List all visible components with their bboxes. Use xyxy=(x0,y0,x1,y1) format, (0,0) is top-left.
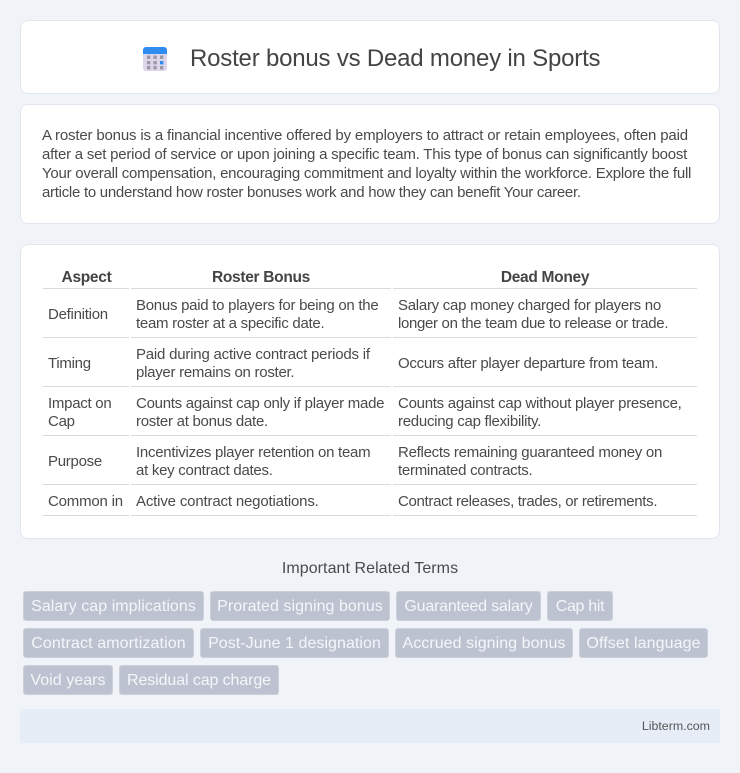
intro text panel xyxy=(20,104,720,224)
row: Purpose: Purpose xyxy=(48,453,102,470)
comparison table panel: Bonus paid to players for being on the xyxy=(136,297,378,314)
comparison table panel: terminated contracts. xyxy=(398,462,532,479)
icon: calendar xyxy=(143,47,167,71)
column heading: Roster Bonus: Roster Bonus xyxy=(212,269,310,286)
related term tags: Residual cap charge xyxy=(127,672,271,689)
comparison table panel: player remains on roster. xyxy=(136,364,294,381)
row: Definition: Definition xyxy=(48,306,108,323)
intro text panel: after a set period of service or upon joining a specific team. This type of bonus can significantly boost xyxy=(42,146,687,163)
comparison table panel xyxy=(20,244,720,539)
related term tags: Accrued signing bonus xyxy=(403,635,565,652)
related term tags: Salary cap implications xyxy=(31,598,196,615)
related term tags: Post-June 1 designation xyxy=(208,635,381,652)
comparison table panel: Occurs after player departure from team. xyxy=(398,355,658,372)
related term tags: Cap hit xyxy=(556,598,604,615)
comparison table panel: roster at bonus date. xyxy=(136,413,268,430)
comparison table panel: Incentivizes player retention on team xyxy=(136,444,370,461)
comparison table panel: reducing cap flexibility. xyxy=(398,413,541,430)
column heading: Dead Money: Dead Money xyxy=(501,269,589,286)
comparison table panel: team roster at a specific date. xyxy=(136,315,324,332)
related term tags: Void years xyxy=(30,672,106,689)
comparison table panel: longer on the team due to release or trade. xyxy=(398,315,668,332)
row: Common in: Common in xyxy=(48,493,123,510)
row: Impact on Cap: Impact on xyxy=(48,395,111,412)
intro text panel: article to understand how roster bonuses work and how they can benefit Your career. xyxy=(42,184,581,201)
related term tags: Guaranteed salary xyxy=(404,598,533,615)
comparison table panel: Active contract negotiations. xyxy=(136,493,319,510)
header panel xyxy=(20,20,720,94)
column heading: Aspect: Aspect xyxy=(62,269,111,286)
related term tags: Offset language xyxy=(586,635,701,652)
comparison table panel: Reflects remaining guaranteed money on xyxy=(398,444,662,461)
comparison table panel: Contract releases, trades, or retirements. xyxy=(398,493,657,510)
comparison table panel: Paid during active contract periods if xyxy=(136,346,370,363)
related term tags: Contract amortization xyxy=(31,635,186,652)
comparison table panel: Counts against cap without player presence, xyxy=(398,395,682,412)
footer bar xyxy=(20,709,720,743)
intro text panel: Your overall compensation, encouraging commitment and loyalty within the workforce. Explore the full xyxy=(42,165,691,182)
related term tags: Prorated signing bonus xyxy=(217,598,383,615)
comparison table panel: at key contract dates. xyxy=(136,462,273,479)
comparison table panel: Counts against cap only if player made xyxy=(136,395,384,412)
related term tags xyxy=(23,591,708,695)
intro text panel: A roster bonus is a financial incentive offered by employers to attract or retain employees, often paid xyxy=(42,127,688,144)
comparison table panel: Cap xyxy=(48,413,75,430)
footer credit: Libterm.com xyxy=(642,719,710,733)
title: Roster bonus vs Dead money in Sports xyxy=(190,45,600,72)
heading: Important Related Terms: Important Related Terms xyxy=(282,560,458,577)
comparison table panel: Salary cap money charged for players no xyxy=(398,297,661,314)
row: Timing: Timing xyxy=(48,355,91,372)
